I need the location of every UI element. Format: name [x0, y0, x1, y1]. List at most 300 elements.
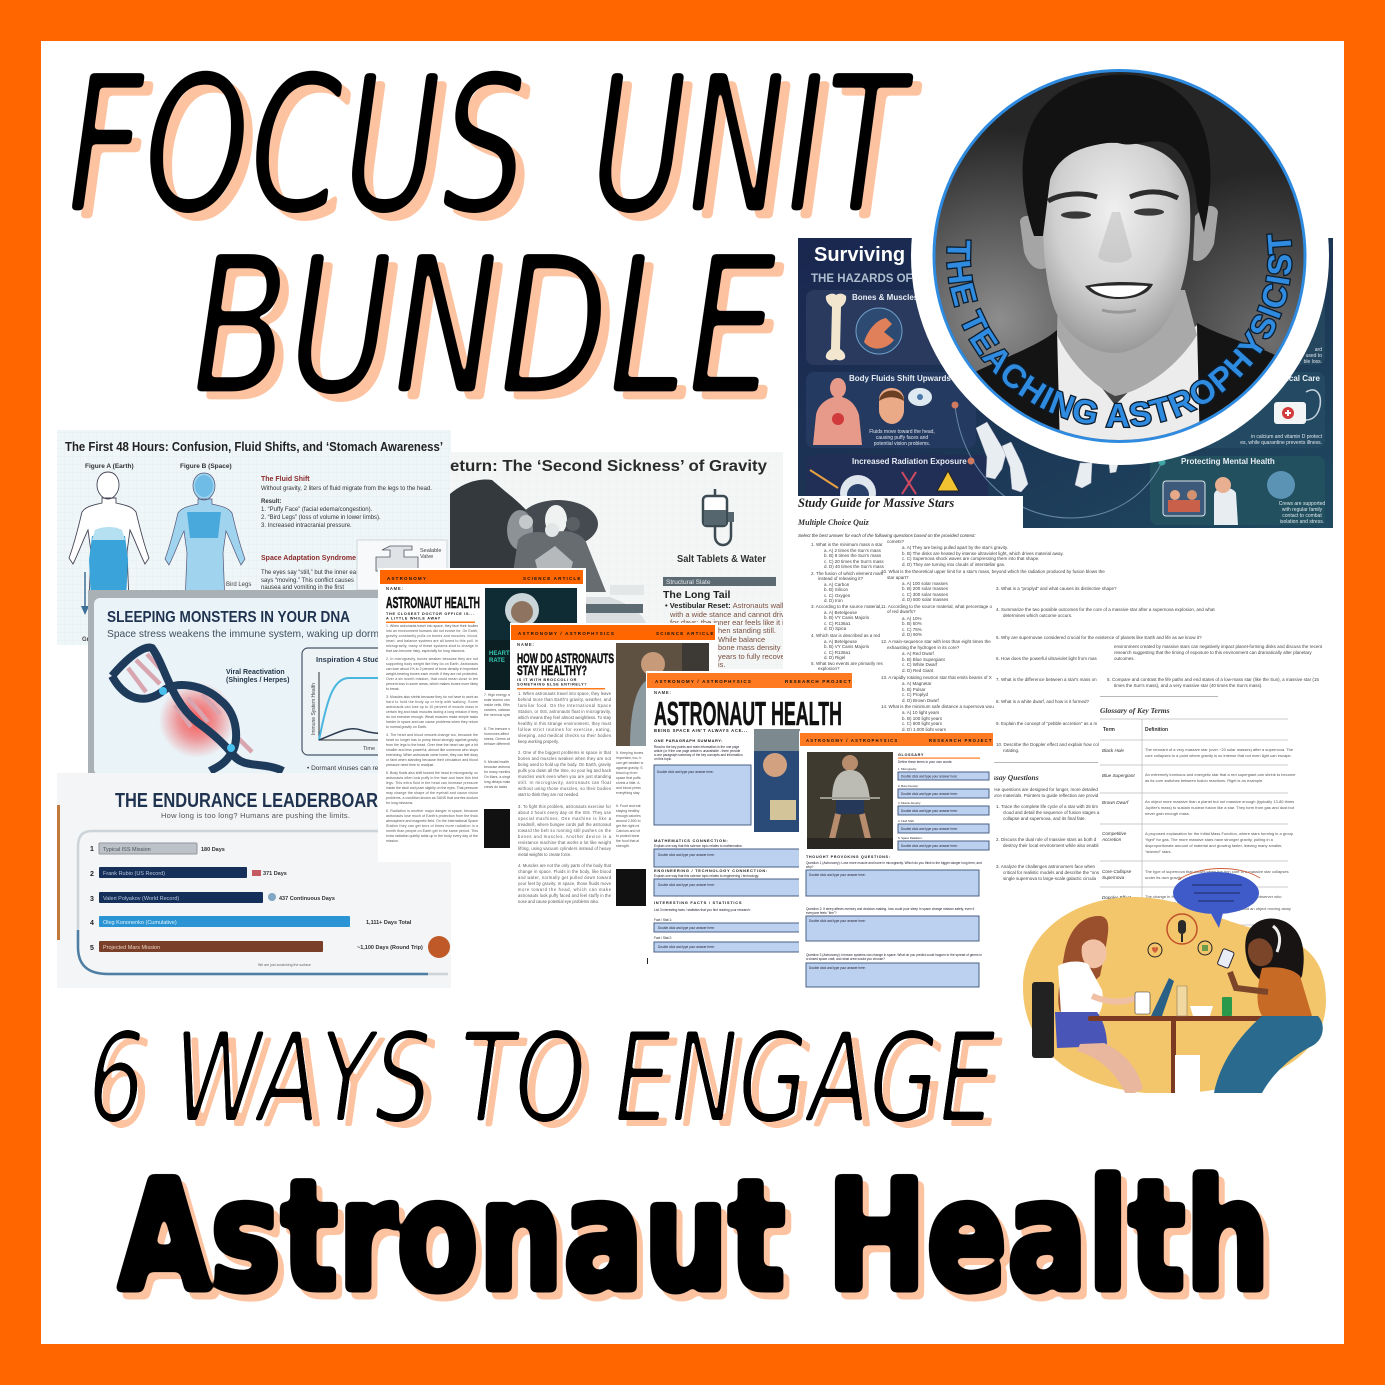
glossary answer boxes: 3. Muscle Atrophy: — [898, 801, 921, 805]
article text: for long missions. — [386, 801, 413, 805]
article text: inside the skull and push slightly on the eyes. That pressure — [386, 786, 478, 790]
panel: article page 2, How do astronauts stay healthy: NAME: — [517, 642, 535, 647]
card: body fluids shift upwards — [806, 372, 976, 448]
quiz column two: a. A) Magnetar — [902, 681, 932, 686]
article text: Calcium and vit — [616, 829, 640, 833]
short answer column: 3. Analyze the challenges astronomers face when — [996, 864, 1096, 869]
panel: article page 4, research project glossary and questions: THOUGHT PROVOKING QUESTIONS: — [806, 855, 891, 859]
card: protecting mental health: with regular family — [1282, 507, 1323, 513]
card: body fluids shift upwards: causing puffy faces and — [876, 435, 928, 441]
panel: glossary of key terms page: environment created by massive stars can negatively impact planet-forming disks and discuss the recent — [1114, 644, 1323, 649]
article text: staying healthy — [616, 809, 640, 813]
figure A body — [69, 472, 149, 602]
short answer column: urce materials. Pointers to guide reflection are provid — [993, 793, 1099, 798]
article text: heart no longer has to pump blood strongly against gravity — [386, 738, 478, 742]
panel: The First 48 Hours slide: nausea and vomiting in the first — [261, 585, 344, 591]
row 1: Typical ISS Mission — [103, 847, 151, 853]
article text: 5. Body fluids also shift toward the head in microgravity, so — [386, 771, 478, 775]
figure: woman on the left — [1032, 916, 1143, 1097]
panel: study guide for massive stars page — [797, 496, 1300, 940]
row 5: ~1,100 Days (Round Trip) — [357, 945, 423, 951]
quiz column two: c. C) 75% — [902, 627, 922, 632]
panel: Sleeping Monsters slide — [88, 590, 408, 775]
panel: article page 2, How do astronauts stay healthy: SOMETHING ELSE ENTIRELY? — [517, 682, 587, 686]
panel: Return, the Second Sickness of Gravity slide: is. — [718, 660, 726, 669]
article text: hard to hold the body up or help with walking. Some — [386, 700, 478, 704]
panel: Endurance Leaderboard slide: How long is too long? Humans are pushing the limits. — [161, 811, 350, 820]
quiz column two: c. C) Supernova shock waves are compressing them into that shape. — [902, 556, 1039, 561]
article text — [518, 691, 644, 904]
panel: article page 4, research project glossary and questions: Define these terms in your own words: — [898, 760, 952, 764]
article text: 9. Mental health — [484, 760, 509, 764]
panel: The First 48 Hours slide: Sealable — [420, 548, 441, 554]
article text: into an environment humans did not evolve for. On Earth, — [386, 629, 478, 633]
quiz column two: d. D) Red Giant — [902, 668, 934, 673]
quiz column two: 10. What is the theoretical upper limit for a star's mass, beyond which the radiation produced by fusion blows the — [881, 569, 1105, 574]
article text: Station, or ISS, astronauts float in microgravity, — [518, 709, 611, 714]
panel: glossary of key terms page: Competitive — [1102, 831, 1127, 836]
quiz column one: a. A) 2 times the Sun's mass — [824, 548, 882, 553]
panel: glossary of key terms page: An object more massive than a planet but not massive enough (typically 13-80 times — [1145, 799, 1294, 804]
title: FOCUS UNIT: UNIT — [600, 43, 924, 264]
article text: 6. Radiation is another major danger in space, because — [386, 809, 478, 813]
panel: article page 3, Astronaut Health research project: ENGINEERING / TECHNOLOGY CONNECTION: — [654, 868, 768, 873]
short answer column: 7. What is the difference between a star's mass on — [996, 677, 1097, 682]
panel: article page 3, Astronaut Health research project: ASTRONAUT HEALTH — [654, 695, 842, 732]
article text: smaller and less powerful, almost like someone who stops — [386, 748, 478, 752]
panel: glossary of key terms page: Blue Supergiant — [1102, 773, 1135, 778]
quiz column two: a. A) Red Dwarf — [902, 651, 935, 656]
article text: percent loss in some areas, which makes bones more likely — [386, 682, 478, 686]
panel: article page 3, Astronaut Health research project: Fact / Stat 1: — [654, 918, 672, 922]
panel: article page 4, research project glossary and questions: GLOSSARY — [898, 753, 924, 757]
panel: article page 3, Astronaut Health research project: NAME: — [654, 690, 672, 695]
quiz column one: b. B) 8 times the Sun's mass — [824, 553, 882, 558]
quiz column one — [811, 542, 885, 671]
card: right top — [1160, 290, 1325, 365]
row 3 — [90, 892, 335, 903]
panel: glossary of key terms page: An extremely luminous and energetic star that a red supergiant can shrink to become — [1145, 772, 1296, 777]
quiz column two: a. A) 100 solar masses — [902, 581, 949, 586]
quiz column two: b. B) 100 light years — [902, 716, 943, 721]
card: protecting mental health: contact to combat — [1282, 513, 1322, 519]
article text: blood up from — [616, 771, 637, 775]
article text: extra radiation quietly adds up in the body every day of the — [386, 834, 478, 838]
panel: The First 48 Hours slide: Space Adaptation Syndrome — [261, 555, 356, 562]
article text: resistance machine that works a lot like weight — [518, 840, 612, 845]
photo: astronauts eating — [754, 729, 800, 832]
article text: space that puffs — [616, 776, 641, 780]
short answer column — [992, 586, 1215, 881]
panel: The First 48 Hours slide: 1. “Puffy Face” (facial edema/congestion). — [261, 507, 373, 513]
panel: Sleeping Monsters slide: Viral Reactivation — [226, 669, 285, 676]
article text: supporting body weight like they do on Earth. Astronauts — [386, 662, 478, 666]
quiz column one: 4. Which star is described as a red — [811, 633, 881, 638]
panel: article page 4, research project glossary and questions: Question 1 (Astronomy): Lose more muscle and bone in microgravity. Which do you think is the bigger danger long term, and — [806, 861, 982, 865]
panel: glossary of key terms page: disproportionate amount of material and growing faster, leaving many smaller, — [1145, 843, 1282, 848]
quiz column one: c. C) R136a1 — [824, 621, 851, 626]
title: BUNDLE: BUNDLE — [192, 216, 777, 437]
photo: man on treadmill — [807, 752, 893, 849]
panel: article page 1, Astronaut Health science article: ASTRONAUT HEALTH — [386, 595, 480, 612]
photo: astronaut in helmet — [485, 588, 577, 690]
short answer column: 4. Summarize the two possible outcomes for the core of a massive star after a supernova explosion, and what — [996, 607, 1215, 612]
panel: glossary of key terms page: The change in frequency or wavelength of light in relation to an observer who — [1145, 894, 1282, 899]
row 2: 2 — [90, 871, 94, 878]
panel: The First 48 Hours slide — [57, 430, 451, 645]
panel: Return, the Second Sickness of Gravity slide: hen standing still. — [718, 626, 776, 635]
article text: hormones affect — [484, 732, 509, 736]
article text: that can become risky, especially for long missions. — [386, 649, 465, 653]
article text: can lose about 1% to 2 percent of bone density in important — [386, 667, 478, 671]
article text: astronauts often look puffy in the face and have thin bird — [386, 776, 478, 780]
article text: problems, a condition known as SANS that worries doctors — [386, 796, 478, 800]
article text: bones and muscles weaken when they are not — [518, 756, 612, 761]
card: medical care — [1160, 372, 1325, 448]
article text: 2. One of the biggest problems in space is that — [518, 750, 612, 755]
panel: glossary of key terms page: Brown Dwarf — [1102, 800, 1129, 805]
panel: article page 3, Astronaut Health research project — [646, 671, 856, 964]
quiz column two: a. A) They are being pulled apart by the star's gravity. — [902, 545, 1008, 550]
title: FOCUS UNIT: UNIT — [591, 35, 915, 256]
panel: Return, the Second Sickness of Gravity slide: The Long Tail — [663, 589, 731, 601]
article text: cancers, cataracts — [484, 708, 513, 712]
panel: glossary of key terms page: under its own gravity. — [1145, 875, 1182, 880]
article text: to normal gravity on Earth. — [386, 725, 427, 729]
glossary answer boxes: Double click and type your answer here: — [901, 827, 958, 831]
row 2: 371 Days — [263, 871, 287, 877]
quiz column two: a. A) 10% — [902, 616, 922, 621]
card: body fluids shift upwards: Fluids move toward the head, — [869, 429, 935, 435]
short answer column: ssay Questions — [992, 773, 1039, 782]
panel: glossary of key terms page: “starved” stars. — [1145, 849, 1172, 854]
panel: article page 3, Astronaut Health research project: INTERESTING FACTS / STATISTICS — [654, 900, 742, 905]
article text: enough calories — [616, 814, 641, 818]
panel: The First 48 Hours slide: Figure A (Earth) — [85, 463, 134, 470]
panel: article page 2, How do astronauts stay healthy: ASTRONOMY / ASTROPHYSICS — [518, 631, 615, 636]
panel: The First 48 Hours slide: The eyes say “still,” but the inner ear — [261, 570, 358, 576]
article text: familiar food. On the International Space — [518, 703, 612, 708]
article text: pulls you down all the time, so your leg and back — [518, 768, 612, 773]
title: FOCUS UNIT: FOCUS — [76, 43, 536, 264]
figure: woman on the right — [1214, 919, 1323, 1093]
glossary table — [1100, 719, 1288, 940]
astronaut legs — [976, 422, 1118, 492]
quiz column two: b. B) 50% — [902, 621, 922, 626]
panel: glossary of key terms page: core collapses to a point where gravity is so intense that not even light can escape. — [1145, 753, 1292, 758]
quiz column one: d. D) 40 times the Sun's mass — [824, 564, 885, 569]
panel: article page 1, Astronaut Health science article: THE CLOSEST DOCTOR OFFICE IS... — [386, 612, 475, 616]
article text: special machines. One machine is like a — [518, 816, 612, 821]
question answer boxes: Question 2: If sleep affects memory and decision-making, how could poor sleep in space change mission safety, even if — [806, 907, 974, 911]
short answer column: destroy their local environment while also enabli — [1003, 843, 1099, 848]
article text: 6. Food and eat — [616, 804, 641, 808]
panel: study guide for massive stars page: Multiple Choice Quiz — [797, 518, 870, 527]
card: body fluids shift upwards: Body Fluids Shift Upwards — [849, 374, 951, 383]
quiz column two: d. D) 1,000 light years — [902, 727, 947, 732]
card: bones and muscles — [806, 290, 976, 365]
question answer boxes: a closed space craft, and what crew would you choose? — [806, 957, 885, 961]
panel: glossary of key terms page: Definition — [1145, 727, 1168, 733]
photo: black and white portrait — [930, 65, 1310, 450]
quiz column two: c. C) White Dwarf — [902, 662, 938, 667]
panel: glossary of key terms page: observer has its light waves compressed (blueshifted), and an object moving away — [1145, 906, 1291, 911]
glossary answer boxes: 1. Microgravity: — [898, 767, 917, 771]
figure B body — [165, 473, 245, 603]
glossary answer boxes: Double click and type your answer here: — [901, 844, 958, 848]
panel: Return, the Second Sickness of Gravity slide: for days; the inner ear feels like it is — [670, 618, 788, 627]
panel: study guide for massive stars page: Study Guide for Massive Stars — [798, 496, 954, 510]
article text: mission. — [386, 839, 399, 843]
glossary answer boxes: Double click and type your answer here: — [901, 809, 958, 813]
article text: from the legs to the head. Over time the heart can get a bit — [386, 743, 478, 747]
article text: month than people on Earth get in the same period. This — [386, 829, 478, 833]
short answer column: collapse and supernova, and its final fate. — [1003, 816, 1086, 821]
panel: glossary of key terms page: Term — [1103, 727, 1115, 733]
panel: glossary of key terms page: 5. Compare and contrast the life paths and end states of a low-mass star (like the Sun), a massive star (15 — [1107, 677, 1319, 682]
question answer boxes: Question 3 (Astronomy): Immune systems can change in space. What do you predict could happen to the spread of germs in — [806, 953, 982, 957]
quiz column one: 3. According to the source material, — [811, 604, 882, 609]
panel: The First 48 Hours slide: The First 48 Hours: Confusion, Fluid Shifts, and ‘Stomach Awareness’ — [65, 439, 443, 454]
article text: weight-bearing bones each month if they are not protected. — [386, 672, 478, 676]
article text: can get weaker w — [616, 761, 644, 765]
short answer column: determines which outcome occurs. — [1003, 613, 1072, 618]
question answer boxes: Double click and type your answer here: — [809, 919, 866, 923]
row 5: Projected Mars Mission — [103, 945, 160, 951]
card: protecting mental health: Crews are supported — [1279, 501, 1325, 507]
quiz column one: a. A) Betelgeuse — [824, 610, 858, 615]
article text: exercising. When astronauts come home, they can feel dizzy — [386, 753, 478, 757]
article text: behind more than Earth's gravity, weather, and — [518, 697, 612, 702]
panel: The First 48 Hours slide: Figure B (Space) — [180, 463, 232, 470]
row 4 — [90, 916, 412, 927]
illustration: DNA helix with red glow — [112, 647, 283, 771]
short answer column: 1. Trace the complete life cycle of a star with 25 tim — [996, 804, 1098, 809]
article text: do not exercise enough. Weak muscles make simple tasks — [386, 715, 478, 719]
article text: may change the shape of the eyeball and cause vision — [386, 791, 478, 795]
article text: keep working properly. — [518, 739, 559, 744]
quiz column one: b. B) VY Canis Majoris — [824, 644, 870, 649]
panel: article page 3, Astronaut Health research project: article (or if the one page article is unavailable - three provide — [654, 749, 741, 753]
panel: The First 48 Hours slide: Valve — [420, 554, 433, 560]
panel: article page 1, Astronaut Health science article: NAME: — [386, 586, 404, 591]
article text — [386, 624, 515, 843]
panel: glossary of key terms page: never gain enough mass. — [1145, 811, 1190, 816]
quiz column two: 13. A rapidly rotating neutron star that emits beams of X — [881, 675, 992, 680]
quiz column one: instead of releasing it? — [818, 576, 864, 581]
article text: change in space. Fluids in the body, like blood — [518, 869, 612, 874]
article text: astronauts lose much of Earth's protection from the thick — [386, 814, 478, 818]
panel: Endurance Leaderboard slide — [57, 773, 451, 988]
quiz column two: exhausting the hydrogen in its core? — [887, 645, 960, 650]
panel: Surviving the hazards of space infographic — [798, 238, 1333, 528]
quiz column one: b. B) Silicon — [824, 587, 849, 592]
panel: Return, the Second Sickness of Gravity slide: While balance — [718, 635, 765, 644]
article text: more toward the head, which can make — [518, 887, 612, 892]
panel: glossary of key terms page: A proposed explanation for the Initial Mass Function, where stars forming in a group — [1145, 831, 1294, 836]
panel: Endurance Leaderboard slide: THE ENDURANCE LEADERBOAR — [115, 790, 378, 812]
short answer column: 5. Why are supernovae considered crucial for the existence of planets like Earth and life as we know it? — [996, 635, 1202, 640]
panel: Return, the Second Sickness of Gravity slide: years to fully recover — [718, 652, 788, 661]
panel: Return, the Second Sickness of Gravity slide: • Vestibular Reset: Astronauts walk — [665, 601, 786, 610]
quiz column two: of red dwarfs? — [887, 609, 916, 614]
article text: the food that al — [616, 839, 639, 843]
row 1: 1 — [90, 846, 94, 853]
quiz column two: star apart? — [887, 575, 909, 580]
article text: important, too, b — [616, 756, 641, 760]
article text: which means they feel almost weightless. To stay — [518, 715, 612, 720]
panel: article page 3, Astronaut Health research project: ASTRONOMY / ASTROPHYSICS — [655, 679, 752, 684]
card: increased radiation exposure — [806, 455, 988, 523]
quiz column two: 12. A main-sequence star with less than eight times the — [881, 639, 991, 644]
row 5 — [90, 936, 450, 958]
card: protecting mental health — [1150, 456, 1325, 525]
panel: glossary of key terms page: the extension of the — [1200, 932, 1236, 937]
panel: Return, the Second Sickness of Gravity slide: eturn: The ‘Second Sickness’ of Gravity — [450, 458, 767, 475]
panel: Return, the Second Sickness of Gravity slide: Salt Tablets & Water — [677, 554, 766, 565]
quiz column one: d. D) Iron — [824, 598, 843, 603]
article text: shrink a little. A — [616, 781, 640, 785]
quiz column one: 1. What is the minimum mass a star — [811, 542, 883, 547]
short answer column: 10. Describe the Doppler effect and explain how col — [996, 742, 1099, 747]
photo: astronaut on exercise machine — [616, 643, 709, 746]
quiz column one: a. A) Carbon — [824, 582, 850, 587]
quiz column two — [881, 539, 1105, 732]
card: right top: ble loss. — [1304, 359, 1322, 365]
article text: sleeping, and medical checks so their bodies — [518, 733, 611, 738]
answer box: summary — [654, 765, 751, 825]
panel: The First 48 Hours slide: 3. Increased intracranial pressure. — [261, 523, 352, 529]
panel: article page 2, How do astronauts stay healthy: HOW DO ASTRONAUTS — [517, 650, 614, 666]
panel: The First 48 Hours slide: Bird Legs — [226, 582, 251, 588]
card: increased radiation exposure: Increased Radiation Exposure — [852, 457, 967, 466]
article text: solar storms can — [484, 698, 510, 702]
panel: glossary of key terms page: research suggesting that the timing of exposure to this environment can dramatically alter planetary — [1114, 650, 1312, 655]
article text: Station they can get tens of times more radiation in a — [386, 824, 478, 828]
quiz column two: a. A) 10 light years — [902, 710, 940, 715]
panel: glossary of key terms page: times the Sun's mass), and a very massive star (40 times the Sun's mass). — [1114, 683, 1263, 688]
panel: article page 1, Astronaut Health science article: A LITTLE WHILE AWAY — [386, 616, 441, 620]
article text: and water, normally get pulled down toward — [518, 875, 612, 880]
article text: still. In microgravity, astronauts can float — [518, 780, 612, 785]
panel: Sleeping Monsters slide: (Shingles / Herpes) — [226, 677, 289, 684]
panel: article page 4, research project glossary and questions: RESEARCH PROJECT — [929, 738, 993, 743]
glossary answer boxes — [898, 767, 989, 850]
row 3: 437 Continuous Days — [279, 896, 335, 902]
panel: article page 1, Astronaut Health science article — [378, 568, 586, 862]
article text: crews do tasks — [484, 785, 507, 789]
article text: Over a six month mission, that could mean close to ten — [386, 677, 478, 681]
short answer column: 6. How does the powerful ultraviolet light from mas — [996, 656, 1098, 661]
panel: The First 48 Hours slide: The Fluid Shift — [261, 476, 310, 483]
answer box: mathematics: Double click and type your answer here: — [658, 853, 715, 857]
panel: Sleeping Monsters slide: SLEEPING MONSTERS IN YOUR DNA — [107, 609, 350, 626]
question answer boxes — [806, 870, 982, 987]
article text: treadmill, where bungee cords pull the astronaut — [518, 822, 612, 827]
panel: article page 1, Astronaut Health science article: SCIENCE ARTICLE — [523, 576, 582, 581]
short answer column: single supernova to large-scale galactic circula — [1003, 876, 1097, 881]
panel: article page 3, Astronaut Health research project: BEING SPACE AIN'T ALWAYS ACE... — [654, 728, 748, 733]
card: body fluids shift upwards: potential vision problems. — [874, 441, 930, 447]
panel: Return, the Second Sickness of Gravity slide: bone mass density — [718, 643, 781, 652]
short answer column: 2. Discuss the dual role of massive stars as both d — [996, 837, 1097, 842]
short answer column: cloud and detail the sequence of fusion stages a — [1003, 810, 1100, 815]
glossary answer boxes: 2. Bone Density: — [898, 784, 919, 788]
row 2: Frank Rubio (US Record) — [103, 871, 165, 877]
heading: 6 WAYS TO ENGAGE: 6 WAYS TO ENGAGE — [96, 1013, 1004, 1157]
short answer column: 3. What is a “proplyd” and what causes its distinctive shape? — [996, 586, 1117, 591]
article text: against gravity. S — [616, 766, 643, 770]
article text: get the right mi — [616, 824, 639, 828]
chart: Inspiration 4 immune health: Immune System Health — [311, 683, 317, 735]
illustration: capsule and recovery crew — [450, 480, 646, 623]
panel: glossary of key terms page: Black Hole — [1102, 748, 1124, 753]
quiz column one: d. D) Spica — [824, 626, 847, 631]
panel: glossary of key terms page: is moving relative to the source. An object moving towards an — [1145, 900, 1254, 905]
quiz column two: b. B) Pulsar — [902, 687, 926, 692]
row 3: 3 — [90, 896, 94, 903]
row 4: 4 — [90, 920, 94, 927]
quiz column one: c. C) Oxygen — [824, 593, 851, 598]
quiz column one: explosion? — [818, 666, 840, 671]
badge: The Teaching Astrophysicist portrait — [911, 69, 1329, 465]
panel: article page 4, research project glossary and questions: why? — [806, 865, 814, 869]
panel: article page 3, Astronaut Health research project: ONE PARAGRAPH SUMMARY: — [654, 738, 723, 743]
article text: 4. The heart and blood vessels change too, because the — [386, 733, 478, 737]
panel: Sleeping Monsters slide: • Dormant viruses can re — [307, 765, 379, 772]
panel: article page 3, Astronaut Health research project: MATHEMATICS CONNECTION: — [654, 838, 728, 843]
answer box: fact 2: Double click and type your answer here: — [658, 945, 715, 949]
quiz column one: c. C) 20 times the Sun's mass — [824, 559, 884, 564]
quiz column two: b. B) The disks are heated by intense ultraviolet light, which drives material away. — [902, 551, 1064, 556]
article text: around 2,500 to — [616, 819, 641, 823]
panel: glossary of key terms page: has its waves stretched (redshifted). — [1145, 912, 1209, 917]
article text: for many months — [484, 770, 510, 774]
row 1: 180 Days — [201, 847, 225, 853]
article text: toward the belt so running still pushes on the — [518, 828, 612, 833]
article text: or faint when standing because their circulation and blood — [386, 758, 478, 762]
quiz column one: a. A) Betelgeuse — [824, 639, 858, 644]
panel: Sleeping Monsters slide: Space stress weakens the immune system, waking up dorm — [107, 628, 379, 640]
quiz column two: comets? — [887, 539, 905, 544]
article text: strength. — [616, 844, 630, 848]
article text: about 2 hours every day on the ISS. They use — [518, 810, 612, 815]
article text: 3. To fight this problem, astronauts exercise for — [518, 804, 612, 809]
panel: glossary of key terms page — [1100, 640, 1323, 940]
row 4: 1,111+ Days Total — [366, 920, 412, 926]
panel: glossary of key terms page: “fight” for gas. The more massive stars have stronger gravity, pulling in a — [1145, 837, 1274, 842]
article text: pressure need time to readjust. — [386, 763, 434, 767]
panel: article page 3, Astronaut Health research project: Explain one way that this science topic relates to mathematics: — [654, 844, 743, 848]
quiz column one: d. D) Rigel — [824, 655, 845, 660]
article text: healthy in this strange environment, they must — [518, 721, 612, 726]
article text: and blood press — [616, 786, 641, 790]
panel: glossary of key terms page: outcomes. — [1114, 656, 1135, 661]
glossary answer boxes: Double click and type your answer here: — [901, 792, 958, 796]
quiz column two: b. B) Blue Supergiant — [902, 657, 946, 662]
panel: glossary of key terms page: Core-Collapse — [1102, 869, 1132, 874]
chart: Inspiration 4 immune health — [302, 648, 408, 755]
article text: because astronauts — [484, 765, 515, 769]
article text: inside cells. Effec — [484, 703, 511, 707]
article text: being used to hold up the body. On Earth, gravity — [518, 762, 612, 767]
panel: glossary of key terms page: Doppler Effect — [1102, 895, 1132, 900]
illustration: podcast listeners — [1023, 868, 1326, 1097]
panel: glossary of key terms page: The type of supernova that occurs when the iron core of a massive star collapses — [1145, 869, 1289, 874]
card: bones and muscles: Bones & Muscles Weaken — [852, 293, 951, 302]
row 1 — [90, 843, 225, 854]
article text: behave differently — [484, 742, 512, 746]
